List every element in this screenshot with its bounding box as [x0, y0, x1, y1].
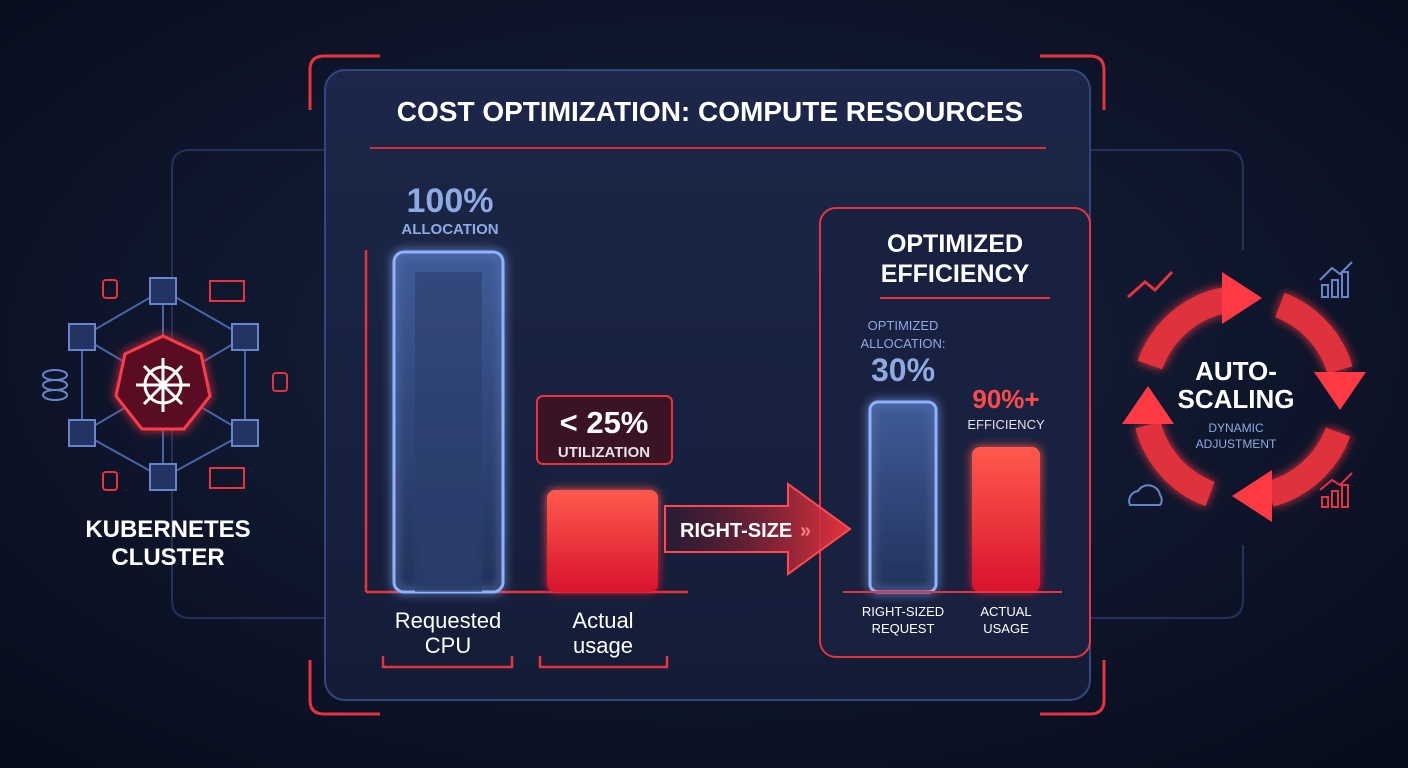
label: 30%: ALLOCATION:: [860, 336, 946, 351]
callout: utilization: < 25%: [560, 405, 648, 440]
icon: auto-scaling cycle: AUTO-: [1195, 356, 1277, 386]
label: 30%: [860, 318, 946, 388]
arrow: right-size: »: [800, 520, 811, 542]
arrow: right-size: [665, 484, 850, 574]
labels: bottom: [862, 604, 1032, 636]
main panel: [310, 56, 1104, 714]
chart axes: [366, 250, 688, 592]
icon: kubernetes cluster: KUBERNETES: [85, 516, 251, 543]
labels: bottom: ACTUAL: [980, 604, 1032, 619]
bar: actual usage optimized: [972, 447, 1040, 592]
label: requested CPU: CPU: [425, 633, 471, 658]
label: 100% allocation: ALLOCATION: [401, 221, 499, 238]
icon: kubernetes cluster: [43, 278, 287, 571]
label: actual usage: usage: [573, 633, 633, 658]
icon: auto-scaling cycle: SCALING: [1178, 384, 1294, 414]
label: requested CPU: [383, 608, 512, 667]
bar: right-sized request: [870, 402, 936, 592]
callout: utilization: [537, 396, 672, 464]
arrow: right-size: RIGHT-SIZE: [680, 520, 792, 542]
label: 90%+: [967, 384, 1045, 432]
label: 100% allocation: [401, 182, 499, 238]
label: requested CPU: Requested: [395, 608, 501, 633]
label: 30%: OPTIMIZED: [868, 318, 938, 333]
label: 90%+: EFFICIENCY: [967, 417, 1045, 432]
panel: optimized efficiency: [820, 208, 1090, 657]
labels: bottom: RIGHT-SIZED: [862, 604, 944, 619]
icon: auto-scaling cycle: DYNAMIC: [1208, 421, 1264, 435]
label: 30%: 30%: [871, 352, 935, 388]
icon: auto-scaling cycle: [1122, 262, 1366, 522]
panel: optimized efficiency: OPTIMIZED: [887, 230, 1023, 258]
label: actual usage: Actual: [572, 608, 634, 633]
icon: auto-scaling cycle: ADJUSTMENT: [1196, 437, 1277, 451]
label: 100% allocation: 100%: [407, 182, 493, 220]
callout: utilization: UTILIZATION: [558, 444, 650, 461]
bar: requested CPU: [394, 252, 503, 592]
labels: bottom: REQUEST: [872, 621, 934, 636]
decorative side frames: [172, 150, 1243, 618]
icon: kubernetes cluster: CLUSTER: [111, 544, 225, 571]
label: 90%+: 90%+: [972, 384, 1040, 414]
labels: bottom: USAGE: [983, 621, 1029, 636]
label: actual usage: [540, 608, 667, 667]
panel: optimized efficiency: EFFICIENCY: [881, 260, 1030, 288]
bar: actual usage: [547, 490, 658, 592]
title: COST OPTIMIZATION: COMPUTE RESOURCES: [397, 96, 1023, 127]
